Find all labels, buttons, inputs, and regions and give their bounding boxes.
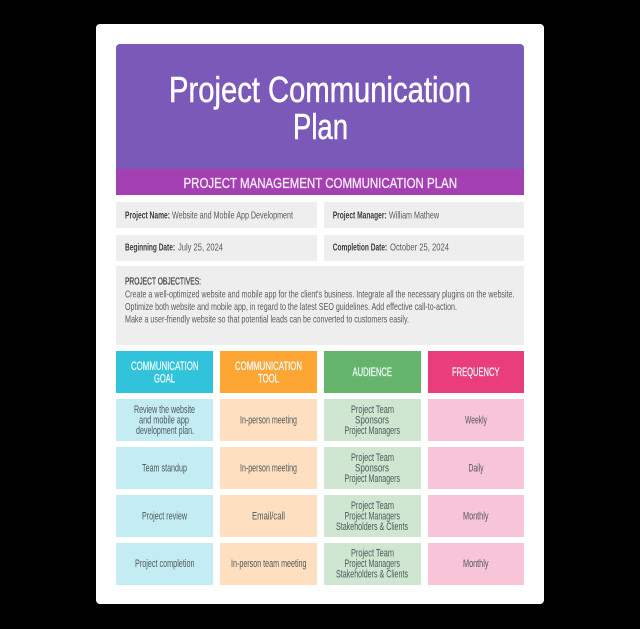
panel: project manager bbox=[324, 202, 524, 228]
table row 2: Project Team bbox=[351, 452, 394, 464]
table row 2: Sponsors bbox=[355, 462, 389, 474]
table row 4: Project completion bbox=[135, 558, 194, 570]
panel: beginning date bbox=[116, 235, 317, 261]
table row 2: In-person meeting bbox=[240, 462, 297, 474]
table row 4 bbox=[116, 543, 524, 585]
table row 4: Project Managers bbox=[344, 558, 400, 570]
panel: completion date: Completion Date: bbox=[333, 242, 387, 254]
panel: project manager: Project Manager: bbox=[333, 210, 387, 222]
table row 2: Team standup bbox=[142, 462, 187, 474]
table row 1: development plan. bbox=[136, 425, 194, 437]
panel: project name: Project Name: bbox=[125, 210, 170, 222]
table header: communication tool: COMMUNICATION bbox=[235, 361, 302, 373]
panel: project objectives bbox=[116, 266, 524, 345]
panel: beginning date: July 25, 2024 bbox=[178, 242, 223, 254]
table header: frequency: FREQUENCY bbox=[452, 367, 500, 379]
table row 2: Project Managers bbox=[344, 473, 400, 485]
panel: purple title banner bbox=[116, 44, 524, 169]
panel: beginning date: Beginning Date: bbox=[125, 242, 175, 254]
table row 3: Stakeholders & Clients bbox=[336, 521, 408, 533]
panel: project objectives: PROJECT OBJECTIVES: bbox=[125, 276, 201, 288]
table row 3: Project Team bbox=[351, 500, 394, 512]
title bbox=[169, 69, 471, 147]
panel: completion date bbox=[324, 235, 524, 261]
panel: project manager: William Mathew bbox=[389, 210, 439, 222]
table header: frequency bbox=[428, 351, 524, 393]
table row 1: Project Team bbox=[351, 404, 394, 416]
panel: project name: Website and Mobile App Development bbox=[172, 210, 293, 222]
table row 4: In-person team meeting bbox=[231, 558, 306, 570]
panel: subtitle band bbox=[116, 169, 524, 195]
table row 2 bbox=[116, 447, 524, 489]
table row 1 bbox=[116, 399, 524, 441]
table row 3: Email/call bbox=[252, 510, 285, 522]
table row 1: Review the website bbox=[134, 404, 195, 416]
table header: audience bbox=[324, 351, 421, 393]
table row 1: In-person meeting bbox=[240, 414, 297, 426]
table row 4: Stakeholders & Clients bbox=[336, 568, 408, 580]
title: Plan bbox=[293, 106, 348, 147]
table row 1: and mobile app bbox=[139, 414, 189, 426]
panel: white page card bbox=[96, 24, 544, 604]
table header: communication tool: TOOL bbox=[258, 374, 279, 386]
table header: communication tool bbox=[220, 351, 317, 393]
panel: subtitle band: PROJECT MANAGEMENT COMMUNICATION PLAN bbox=[184, 175, 457, 192]
title: Project Communication bbox=[169, 69, 471, 110]
table row 3: Monthly bbox=[463, 510, 489, 522]
table row 3: Project review bbox=[142, 510, 187, 522]
table header: communication goal bbox=[116, 351, 213, 393]
table row 1: Weekly bbox=[465, 414, 487, 426]
table header: communication goal: COMMUNICATION bbox=[131, 361, 198, 373]
table row 3: Project Managers bbox=[344, 510, 400, 522]
table header: communication goal: GOAL bbox=[154, 374, 175, 386]
panel: project name bbox=[116, 202, 317, 228]
panel: project objectives: Make a user-friendly website so that potential leads can be converted to customers easily. bbox=[125, 314, 409, 326]
table row 4: Project Team bbox=[351, 548, 394, 560]
table header: audience: AUDIENCE bbox=[352, 367, 392, 379]
table row 4: Monthly bbox=[463, 558, 489, 570]
table row 1: Sponsors bbox=[355, 414, 389, 426]
panel: completion date: October 25, 2024 bbox=[390, 242, 449, 254]
table row 3 bbox=[116, 495, 524, 537]
table row 1: Project Managers bbox=[344, 425, 400, 437]
table row 2: Daily bbox=[468, 462, 484, 474]
panel: project objectives: Optimize both website and mobile app, in regard to the latest SEO guidelines. Add effective call-to-action. bbox=[125, 301, 457, 313]
